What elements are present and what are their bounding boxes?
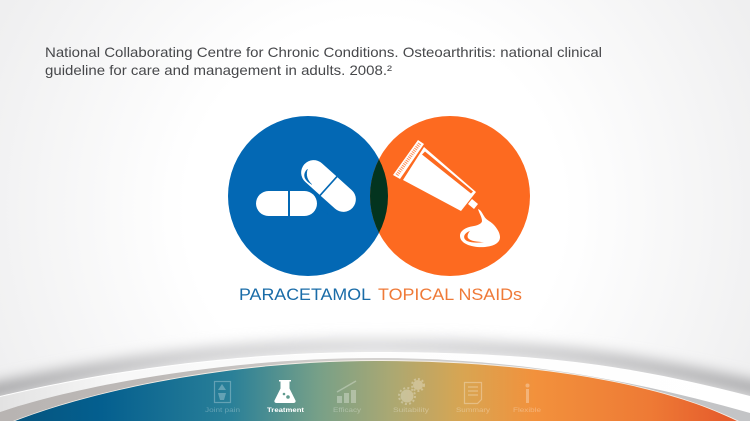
nav item: summary: Summary — [456, 407, 491, 414]
citation text — [45, 44, 602, 78]
venn diagram — [228, 116, 530, 276]
label: topical NSAIDs: TOPICAL NSAIDs — [378, 285, 522, 304]
label: paracetamol: PARACETAMOL — [239, 285, 371, 304]
nav item: flexible: Flexible — [513, 407, 541, 414]
nav item: joint pain: Joint pain — [205, 407, 240, 414]
nav item: summary — [456, 382, 491, 414]
panel: topical NSAIDs circle — [370, 116, 530, 276]
nav item: efficacy: Efficacy — [333, 407, 362, 414]
footer navigation swoosh — [0, 346, 750, 421]
icon: ointment tube — [393, 140, 500, 247]
panel: paracetamol circle — [228, 116, 388, 276]
nav item: suitability: Suitability — [393, 407, 430, 414]
nav item: suitability — [393, 379, 430, 414]
citation text: guideline for care and management in adults. 2008.² — [45, 62, 392, 78]
icon: capsules — [256, 155, 361, 217]
nav item: treatment: Treatment — [267, 407, 305, 414]
circle overlap — [370, 159, 388, 233]
nav item: efficacy — [333, 381, 362, 414]
nav item: treatment — [267, 380, 305, 414]
nav item: flexible — [513, 384, 541, 414]
navigation icons — [205, 379, 541, 414]
heading: drug labels — [239, 285, 522, 304]
nav item: joint pain — [205, 382, 240, 414]
citation text: National Collaborating Centre for Chronic Conditions. Osteoarthritis: national clinical — [45, 44, 602, 60]
